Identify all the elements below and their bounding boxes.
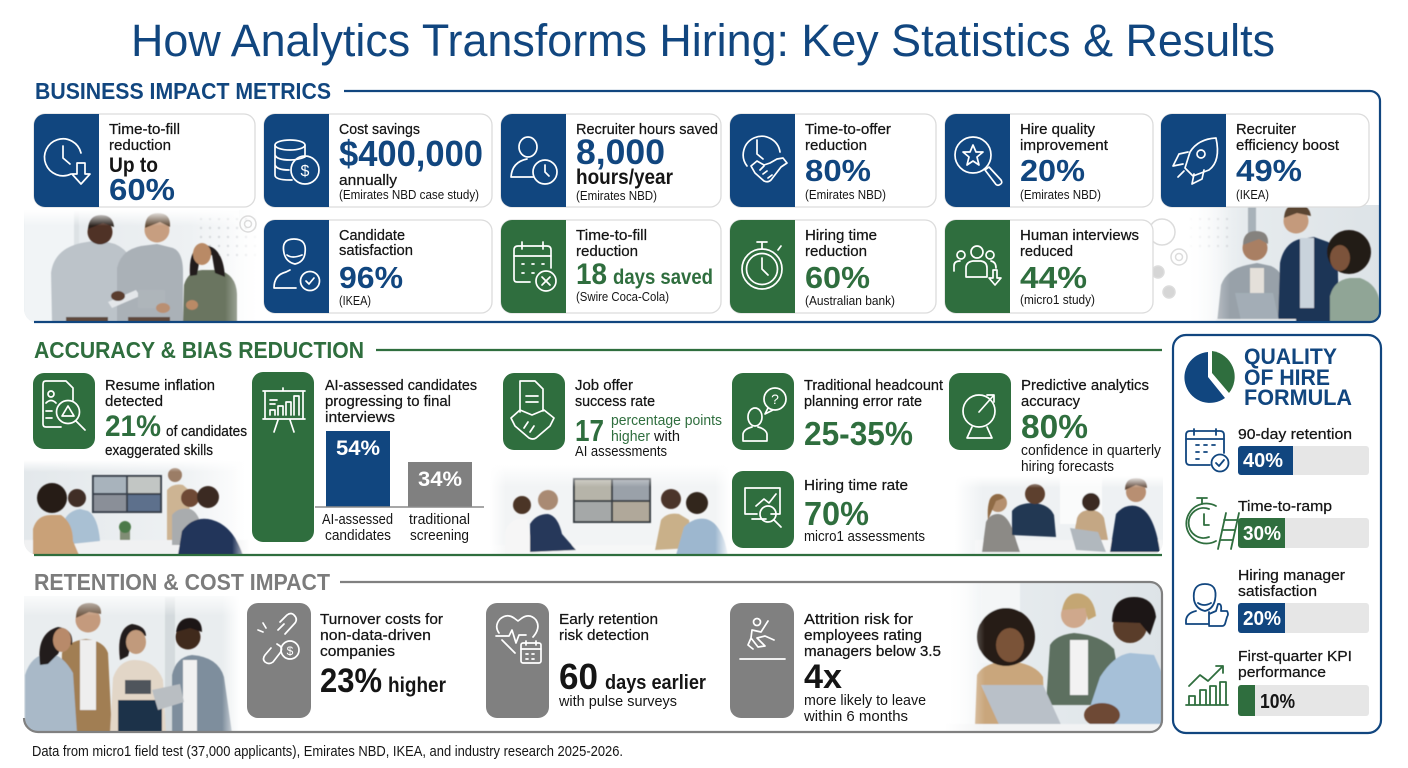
icon: clock with handshake (730, 114, 795, 207)
card: human interviews reduced 44%: reduced (1020, 243, 1073, 260)
photo: three colleagues with tablets (24, 210, 262, 323)
card: human interviews reduced 44%: (micro1 study) (1020, 292, 1095, 307)
card: recruiter hours saved 8,000: Recruiter hours saved (576, 121, 718, 138)
icon: screen with chart and magnifier (732, 471, 794, 548)
card: hiring time reduction 60%: 60% (805, 260, 870, 295)
card: job offer success rate: percentage points (611, 412, 722, 429)
icon: coins with dollar (264, 114, 329, 207)
row: first-quarter KPI performance 10%: performance (1238, 664, 1326, 681)
card: hiring time reduction 60%: Hiring time (805, 227, 877, 244)
card: resume inflation detected 21% (33, 373, 247, 459)
card: early retention risk detection: days earlier (605, 672, 706, 694)
title: How Analytics Transforms Hiring: Key Statistics & Results (131, 15, 1275, 66)
icon: stopwatch with ladder (1186, 498, 1239, 549)
card: recruiter efficiency boost 49%: efficiency boost (1236, 137, 1340, 154)
card: hiring time reduction 60%: reduction (805, 243, 867, 260)
card: time-to-fill reduction up to 60% (34, 114, 255, 207)
progress bar: 10%: 10% (1260, 691, 1295, 713)
icon: coins with dollar: $ (301, 163, 310, 180)
card: candidate satisfaction 96% (264, 220, 492, 313)
panel: business impact metrics (24, 78, 1380, 323)
row: first-quarter KPI performance 10% (1186, 648, 1369, 716)
card: time-to-fill reduction 18 days saved: Time-to-fill (576, 227, 647, 244)
bar chart: 54% vs 34%: AI-assessed (322, 511, 393, 528)
icon: person with question bubble: ? (771, 391, 779, 407)
card: predictive analytics accuracy 80%: confidence in quarterly (1021, 442, 1161, 459)
card: resume inflation detected 21%: exaggerated skills (105, 442, 213, 459)
card: job offer success rate: 17 (575, 413, 604, 448)
panel: accuracy and bias reduction (24, 337, 1163, 555)
card: time-to-fill reduction 18 days saved: reduction (576, 243, 638, 260)
card: recruiter efficiency boost 49%: 49% (1236, 153, 1302, 188)
bar chart: 54% vs 34%: screening (410, 527, 469, 544)
card: attrition risk 4x: managers below 3.5 (804, 643, 941, 660)
row: hiring manager satisfaction 20%: satisfaction (1238, 583, 1317, 600)
row: first-quarter KPI performance 10%: First-quarter KPI (1238, 648, 1352, 665)
card: attrition risk 4x: more likely to leave (804, 692, 926, 709)
icon: broken chain with dollar (247, 603, 311, 718)
card: AI-assessed candidates progressing to final interviews: AI-assessed candidates (325, 377, 477, 394)
decoration: gears (240, 216, 1187, 298)
heading: retention and cost impact: RETENTION & COST IMPACT (34, 569, 330, 595)
icon: growth chart (1186, 666, 1228, 705)
card: candidate satisfaction 96%: Candidate (339, 227, 405, 244)
card: job offer success rate: with (653, 428, 680, 445)
card: candidate satisfaction 96%: 96% (339, 260, 403, 295)
card: recruiter efficiency boost 49%: (IKEA) (1236, 187, 1269, 202)
card: time-to-fill reduction up to 60%: Up to (109, 154, 158, 177)
card: hiring time rate 70%: 70% (804, 495, 869, 532)
card: hiring time rate 70%: Hiring time rate (804, 477, 908, 494)
icon: person with clock (501, 114, 566, 207)
card: human interviews reduced 44%: 44% (1020, 260, 1087, 295)
card: time-to-fill reduction 18 days saved: days saved (613, 266, 713, 289)
progress bar: 40% (1238, 446, 1369, 475)
row: time-to-ramp 30%: Time-to-ramp (1238, 498, 1332, 515)
photo: video conference discussion (500, 477, 728, 554)
icon: broken chain with dollar: $ (287, 644, 294, 658)
card: attrition risk 4x: 4x (804, 658, 842, 696)
card: job offer success rate: success rate (575, 393, 655, 410)
card: time-to-fill reduction up to 60%: reduction (109, 137, 171, 154)
card: cost savings $400,000: (Emirates NBD case study) (339, 187, 479, 202)
frame: grey section outline (24, 582, 1162, 732)
icon: falling person (730, 603, 794, 718)
icon: rocket (1161, 114, 1226, 207)
row: hiring manager satisfaction 20% (1186, 567, 1369, 633)
card: traditional headcount planning error rate: 25-35% (804, 415, 913, 452)
card: AI-assessed candidates progressing to final interviews: progressing to final (325, 393, 451, 410)
icon: calendar with x (501, 220, 566, 313)
progress bar: 20%: 20% (1243, 608, 1281, 630)
heading: quality of hire formula: QUALITY (1244, 344, 1337, 369)
card: turnover costs 23% higher: non-data-driven (320, 627, 431, 644)
card: resume inflation detected 21%: 21% (105, 410, 161, 443)
card: hiring time rate 70% (732, 471, 925, 548)
card: hiring time reduction 60% (730, 220, 936, 313)
card: cost savings $400,000: $400,000 (339, 133, 483, 174)
card: predictive analytics accuracy 80%: accuracy (1021, 393, 1080, 410)
icon: crystal ball with arrow (949, 373, 1011, 450)
frame: blue section outline (34, 91, 1380, 322)
card: cost savings $400,000: annually (339, 172, 398, 189)
card: cost savings $400,000 (264, 114, 492, 207)
card: traditional headcount planning error rate (732, 373, 944, 452)
card: hiring time rate 70%: micro1 assessments (804, 528, 925, 545)
card: early retention risk detection: risk detection (559, 627, 649, 644)
card: job offer success rate: AI assessments (575, 443, 667, 460)
card: time-to-fill reduction up to 60%: 60% (109, 172, 175, 207)
card: turnover costs 23% higher: higher (388, 674, 446, 697)
card: job offer success rate: higher (611, 428, 650, 445)
card: attrition risk 4x: within 6 months (803, 708, 908, 725)
progress bar: 10% (1238, 685, 1369, 716)
row: time-to-ramp 30% (1186, 498, 1369, 549)
card: early retention risk detection: Early retention (559, 611, 658, 628)
card: hire quality improvement 20%: (Emirates NBD) (1020, 187, 1101, 202)
card: predictive analytics accuracy 80%: 80% (1021, 408, 1088, 445)
card: job offer success rate (503, 373, 722, 460)
card: time-to-offer reduction 80%: (Emirates NBD) (805, 187, 886, 202)
card: recruiter efficiency boost 49% (1161, 114, 1369, 207)
heading: quality of hire formula: FORMULA (1244, 385, 1352, 410)
card: job offer success rate: Job offer (575, 377, 633, 394)
panel: retention and cost impact (24, 569, 1163, 733)
card: time-to-fill reduction 18 days saved (501, 220, 721, 313)
row: 90-day retention 40%: 90-day retention (1238, 426, 1352, 443)
icon: resume with warning magnifier (33, 373, 95, 449)
heading: accuracy and bias reduction: ACCURACY & BIAS REDUCTION (34, 337, 364, 363)
card: early retention risk detection: with pulse surveys (558, 693, 677, 710)
card: traditional headcount planning error rate: Traditional headcount (804, 377, 944, 394)
card: attrition risk 4x: employees rating (804, 627, 922, 644)
card: resume inflation detected 21%: detected (105, 393, 163, 410)
photo: three colleagues at a laptop (1199, 205, 1379, 321)
card: traditional headcount planning error rate: planning error rate (804, 393, 922, 410)
card: attrition risk 4x (730, 603, 941, 725)
card: turnover costs 23% higher: 23% (320, 662, 382, 700)
icon: smiling person with check (264, 220, 329, 313)
card: turnover costs 23% higher: Turnover costs for (320, 611, 443, 628)
footer note: Data from micro1 field test (37,000 applicants), Emirates NBD, IKEA, and industry research 2025-2026. (32, 743, 623, 760)
icon: stopwatch (730, 220, 795, 313)
card: hire quality improvement 20%: improvement (1020, 137, 1109, 154)
icon: magnifier with star (945, 114, 1010, 207)
icon: heartbeat with calendar (486, 603, 549, 718)
card: time-to-fill reduction up to 60%: Time-to-fill (109, 121, 180, 138)
card: hire quality improvement 20%: 20% (1020, 153, 1085, 188)
card: cost savings $400,000: Cost savings (339, 121, 420, 138)
card: recruiter efficiency boost 49%: Recruiter (1236, 121, 1296, 138)
frame: green section rules (34, 350, 1162, 555)
card: candidate satisfaction 96%: satisfaction (339, 242, 413, 259)
card: time-to-offer reduction 80%: 80% (805, 153, 871, 188)
card: attrition risk 4x: Attrition risk for (804, 611, 913, 628)
card: time-to-fill reduction 18 days saved: 18 (576, 258, 607, 291)
icon: contract with handshake (503, 373, 565, 450)
photo: four colleagues standing (24, 590, 240, 733)
progress bar: 20% (1238, 603, 1369, 633)
card: early retention risk detection (486, 603, 706, 718)
heading: quality of hire formula (1244, 344, 1352, 410)
card: turnover costs 23% higher: companies (320, 643, 395, 660)
card: AI-assessed candidates progressing to final interviews (252, 372, 484, 544)
progress bar: 40%: 40% (1243, 450, 1283, 472)
card: resume inflation detected 21%: of candidates (166, 423, 247, 440)
card: AI-assessed candidates progressing to final interviews: interviews (325, 409, 395, 426)
icon: group with down arrow (945, 220, 1010, 313)
card: recruiter hours saved 8,000 (501, 114, 721, 207)
heading: business impact metrics: BUSINESS IMPACT METRICS (35, 78, 331, 104)
card: candidate satisfaction 96%: (IKEA) (339, 293, 371, 308)
card: human interviews reduced 44% (945, 220, 1153, 313)
card: resume inflation detected 21%: Resume inflation (105, 377, 215, 394)
card: turnover costs 23% higher (247, 603, 446, 718)
card: hire quality improvement 20% (945, 114, 1153, 207)
bar chart: 54% vs 34%: 54% (336, 437, 380, 460)
bar chart: 54% vs 34%: candidates (325, 527, 391, 544)
card: time-to-fill reduction 18 days saved: (Swire Coca-Cola) (576, 289, 669, 304)
card: predictive analytics accuracy 80%: hiring forecasts (1021, 458, 1114, 475)
icon: clock with down arrow (34, 114, 99, 207)
card: early retention risk detection: 60 (559, 656, 598, 697)
card: hire quality improvement 20%: Hire quality (1020, 121, 1095, 138)
icon: person with question bubble (732, 373, 794, 450)
icon: calendar with check (1186, 429, 1228, 472)
bar chart: 54% vs 34%: 34% (418, 468, 462, 491)
card: recruiter hours saved 8,000: 8,000 (576, 133, 665, 172)
card: recruiter hours saved 8,000: (Emirates NBD) (576, 188, 657, 203)
progress bar: 30% (1238, 518, 1369, 548)
bar chart: 54% vs 34% (315, 431, 484, 544)
progress bar: 30%: 30% (1243, 523, 1281, 545)
card: time-to-offer reduction 80% (730, 114, 936, 207)
card: time-to-offer reduction 80%: reduction (805, 137, 867, 154)
card: predictive analytics accuracy 80% (949, 373, 1161, 475)
card: predictive analytics accuracy 80%: Predictive analytics (1021, 377, 1149, 394)
icon: person with thumbs up (1186, 584, 1228, 626)
card: recruiter hours saved 8,000: hours/year (576, 166, 673, 189)
icon: presentation board (252, 372, 314, 542)
row: hiring manager satisfaction 20%: Hiring manager (1238, 567, 1345, 584)
row: 90-day retention 40% (1186, 426, 1369, 475)
card: human interviews reduced 44%: Human interviews (1020, 227, 1139, 244)
panel: quality of hire formula (1173, 335, 1381, 733)
card: time-to-offer reduction 80%: Time-to-offer (805, 121, 891, 138)
chart: pie (1184, 351, 1235, 403)
photo: three colleagues at a laptop (970, 583, 1163, 731)
photo: team video meeting (24, 460, 250, 555)
card: hiring time reduction 60%: (Australian bank) (805, 293, 895, 308)
photo: meeting around a laptop (955, 476, 1163, 555)
heading: quality of hire formula: OF HIRE (1244, 365, 1330, 390)
bar chart: 54% vs 34%: traditional (409, 511, 470, 528)
